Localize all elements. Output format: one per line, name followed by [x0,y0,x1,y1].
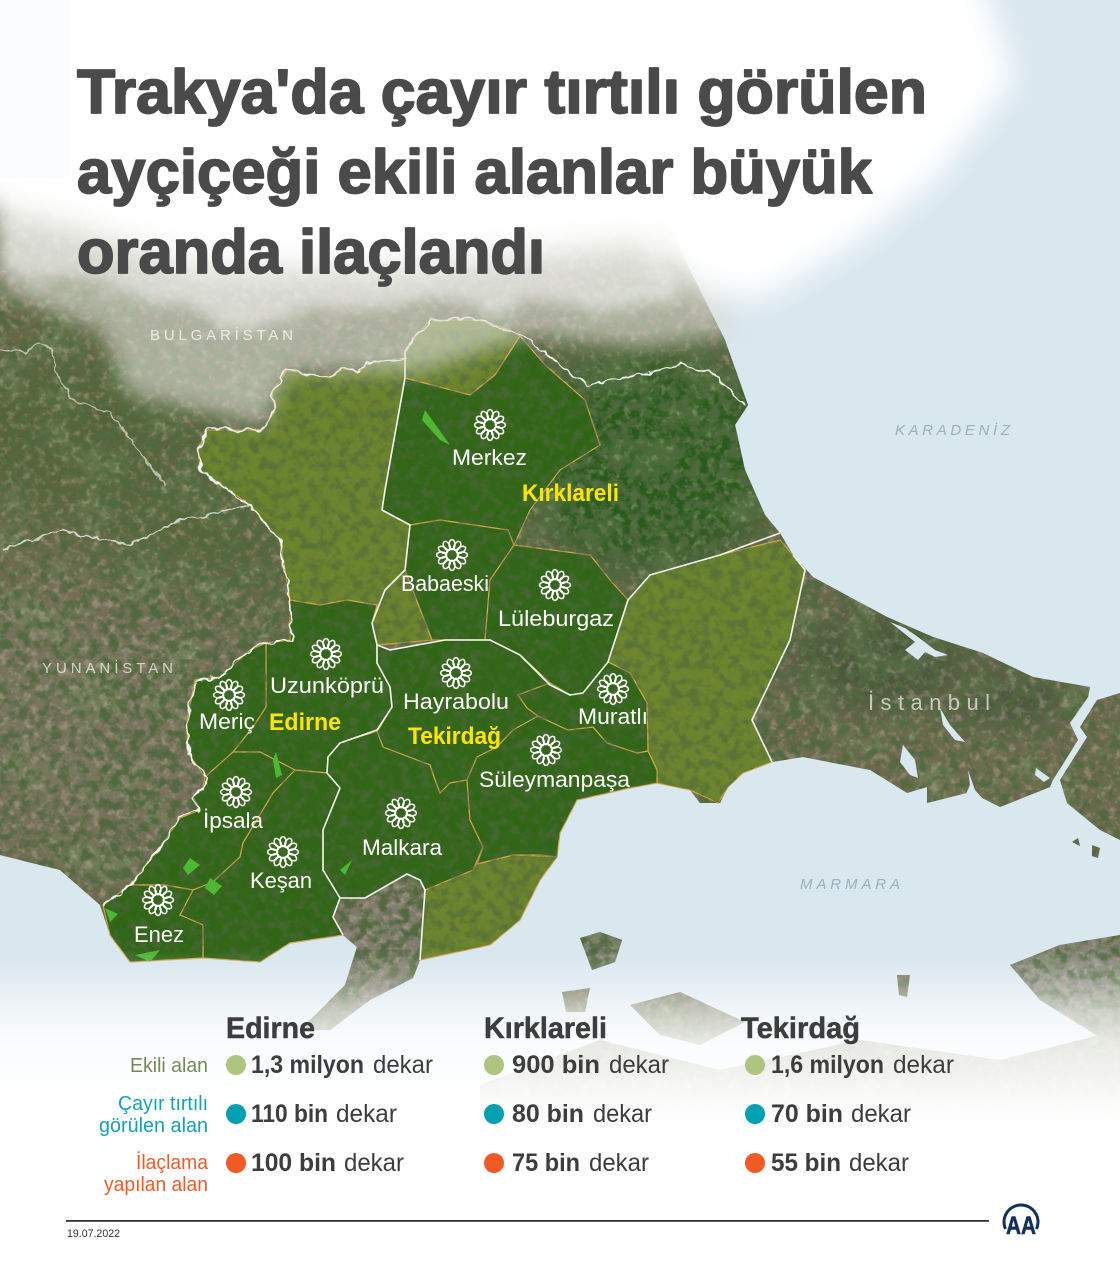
district: Hayrabolu [377,640,550,793]
column: Kırklareli: 80 bin [512,1100,584,1128]
legend: row labels: İlaçlama [136,1151,209,1174]
bottom white fade [0,950,1120,1130]
district: Keşan [180,770,343,962]
column: Kırklareli: dekar [589,1149,649,1177]
district labels: Meriç [199,709,255,734]
map: dark green affected districts [103,336,657,962]
lakes and straits [890,622,1050,798]
legend: row labels: görülen alan [99,1115,208,1137]
district: Uzunköprü [233,600,392,773]
column: Kırklareli: Kırklareli [484,1012,607,1045]
province labels [269,480,619,750]
column: Tekirdağ: Tekirdağ [741,1012,860,1045]
province and international borders [0,320,805,960]
column: Edirne: dekar [344,1149,404,1177]
district: Merkez [382,336,600,545]
column: Tekirdağ: dekar [849,1149,909,1177]
country and sea labels: YUNANİSTAN [42,659,173,677]
title: ayçiçeği ekili alanlar büyük [77,138,873,207]
clouds over the northern map [0,0,1015,425]
column: Tekirdağ: dekar [851,1100,911,1128]
satellite land mass [0,170,1120,1150]
district: Enez [103,885,203,962]
legend: row labels: Ekili alan [130,1055,208,1077]
province labels: Kırklareli [522,480,619,507]
district labels: Hayrabolu [403,689,509,714]
column: Edirne: dekar [373,1051,433,1079]
country and sea labels: BULGARİSTAN [150,326,293,344]
column: Tekirdağ: 70 bin [771,1100,843,1128]
district: Lüleburgaz [485,545,628,695]
column: Tekirdağ: 55 bin [771,1149,841,1177]
column: Edirne: 1,3 milyon [251,1051,364,1079]
country and sea labels: KARADENİZ [895,422,1011,439]
legend: row labels [99,1055,209,1196]
province labels: Tekirdağ [408,723,501,750]
district labels: Babaeski [401,571,489,596]
district: Muratlı [518,662,648,753]
column: Tekirdağ: dekar [893,1051,954,1079]
sunflower icons [143,410,628,915]
province labels: Edirne [269,709,341,736]
legend: row labels: Çayır tırtılı [118,1093,208,1115]
district labels: Muratlı [578,704,648,729]
country and sea labels: İstanbul [868,690,990,715]
column: Tekirdağ [741,1012,954,1177]
footer white area [0,1130,1120,1287]
icon: agency logo [1004,1205,1038,1240]
title [77,58,927,287]
district: Meriç [187,643,266,777]
column: Tekirdağ: 1,6 milyon [771,1051,884,1079]
column: Kırklareli: 75 bin [512,1149,580,1177]
district labels: Süleymanpaşa [479,767,630,792]
column: Edirne: 100 bin [251,1149,336,1177]
district labels: Malkara [362,835,442,860]
column: Kırklareli: dekar [593,1100,652,1128]
bright green field patches [105,410,450,962]
district: İpsala [130,752,295,890]
title: oranda ilaçlandı [77,218,545,287]
title: Trakya'da çayır tırtılı görülen [77,58,927,127]
legend: row labels: yapılan alan [104,1174,208,1196]
map: olive non-affected areas [198,320,805,960]
district labels: İpsala [203,808,263,833]
column: Edirne [226,1012,433,1177]
country and sea labels: MARMARA [800,876,900,893]
district: Malkara [323,731,483,898]
district: Süleymanpaşa [467,716,657,864]
district labels: Lüleburgaz [498,606,614,631]
district labels: Keşan [250,868,312,893]
column: Edirne: Edirne [226,1012,315,1045]
district labels: Uzunköprü [270,673,384,698]
column: Kırklareli: dekar [609,1051,669,1079]
country and sea labels [42,326,1011,893]
column: Kırklareli [484,1012,669,1177]
date: 19.07.2022 [67,1228,120,1240]
column: Edirne: dekar [336,1100,397,1128]
column: Edirne: 110 bin [251,1100,328,1128]
map texture over districts [100,330,820,970]
icon: agency logo: AA [1006,1212,1036,1240]
footer rule [66,1220,989,1222]
district labels: Enez [134,922,184,947]
district labels: Merkez [452,445,527,470]
column: Kırklareli: 900 bin [512,1051,600,1079]
district: Babaeski [405,520,514,640]
district labels [134,445,648,947]
